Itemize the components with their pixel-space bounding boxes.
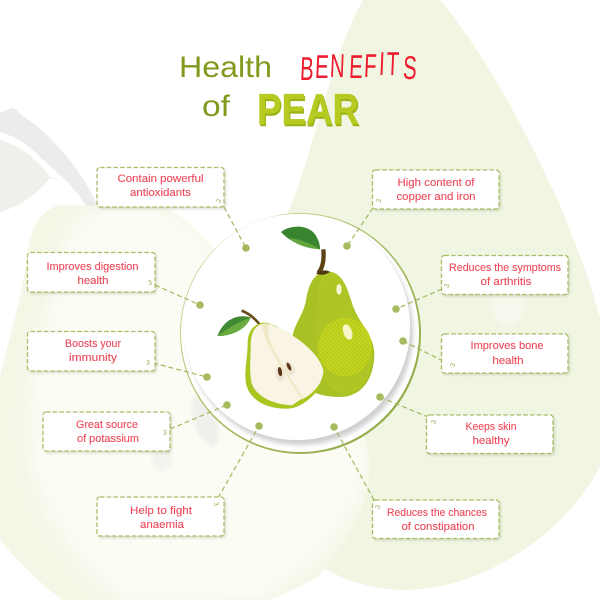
callout: Improves bone health: 3 [450,362,457,368]
callout: Reduces the symptoms of arthritis [392,256,568,313]
callout: Help to fight anaemia: 3 [212,501,220,507]
callout: Contain powerful antioxidants: Contain powerful [118,173,204,185]
background: large pale pear right [240,0,600,590]
callout: Help to fight anaemia: Help to fight [130,505,192,517]
callout: Improves digestion health: health [78,275,108,287]
heading word: PEAR: PEAR [257,85,359,134]
callout: Great source of potassium [43,401,231,451]
callout: Great source of potassium: Great source [76,419,138,431]
callout: High content of copper and iron: copper and iron [396,191,476,203]
callout: Improves digestion health: 3 [147,279,153,287]
callout: Reduces the chances of constipation: Reduces the chances [387,507,487,519]
heading word: of: of [202,90,231,123]
callout: High content of copper and iron: High content of [398,177,475,189]
heading word: Health: Health [179,51,272,84]
callout: Improves bone health: health [492,355,524,367]
callout: Reduces the symptoms of arthritis: Reduces the symptoms [449,262,561,274]
callout: High content of copper and iron [343,170,499,250]
callout: Improves digestion health: Improves digestion [46,261,138,273]
callout: Great source of potassium: of potassium [77,433,139,445]
half pear leaf [217,316,251,336]
callout: Contain powerful antioxidants [97,168,250,252]
heading word: PEAR: PEAR [258,87,360,136]
pear illustration [217,227,374,409]
callout: Help to fight anaemia: anaemia [140,519,185,531]
callout: Reduces the chances of constipation: 3 [375,504,382,510]
callout: Reduces the chances of constipation: of constipation [402,521,474,533]
callout: Keeps skin healthy [376,393,553,454]
callout: Contain powerful antioxidants: 3 [215,198,223,205]
whole pear leaf [281,227,320,249]
callout: Great source of potassium: 3 [163,430,167,437]
callout: Boosts your immunity: Boosts your [65,338,121,350]
heading word: BENEFITS: BENEFITS [299,45,418,87]
callout: Improves bone health: Improves bone [470,340,544,352]
callout: Reduces the chances of constipation [330,423,499,538]
callout: Reduces the symptoms of arthritis: 3 [444,283,451,289]
callout: Keeps skin healthy: healthy [472,435,510,447]
icon: whole pear [281,227,374,397]
central circle [180,213,421,454]
callout: Improves digestion health [28,252,204,309]
callout: Boosts your immunity: immunity [69,352,118,364]
icon: half pear [217,311,323,409]
background: pale pear left [0,108,369,600]
callout: Improves bone health [399,334,568,373]
callout: Help to fight anaemia [97,422,263,536]
callout: Contain powerful antioxidants: antioxidants [130,187,192,199]
title [179,45,418,136]
callout: Keeps skin healthy: 3 [431,419,438,425]
callout: Keeps skin healthy: Keeps skin [466,421,516,433]
callout: High content of copper and iron: 3 [376,198,383,204]
callout: Boosts your immunity: 3 [146,360,150,367]
callout: Reduces the symptoms of arthritis: of arthritis [480,276,532,288]
callout: Boosts your immunity [28,332,211,381]
